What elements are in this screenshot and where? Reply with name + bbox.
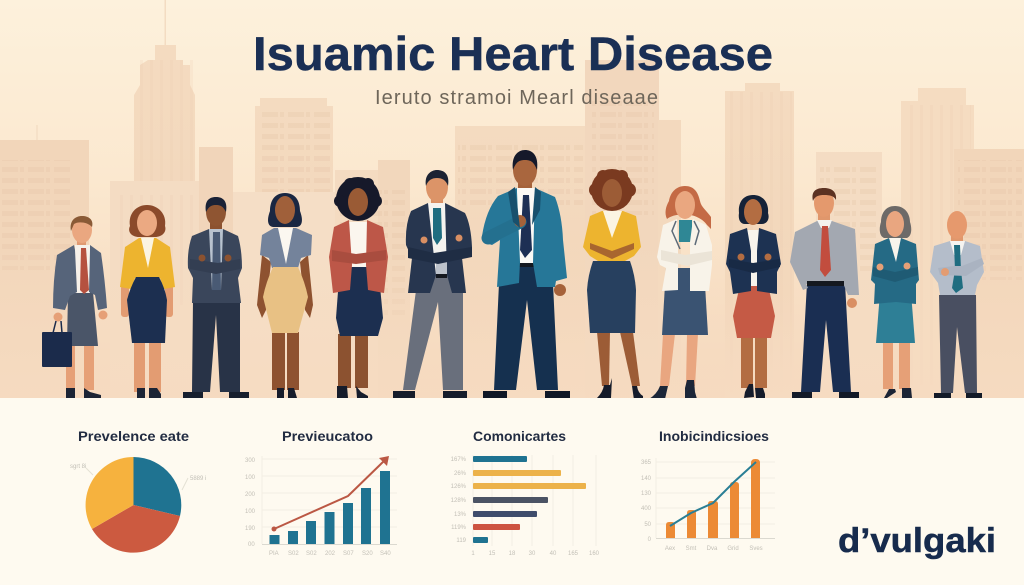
combo chart grid and labels: Dva (707, 546, 718, 552)
person 2: yellow blouse (120, 205, 175, 398)
person 12: teal blazer and skirt (871, 206, 919, 398)
bar chart heading: Previeucatoo (282, 429, 373, 444)
horizontal chart grid and labels: 167% (451, 457, 467, 463)
bar chart grid and axes: 300 (245, 458, 256, 464)
bar chart grid and axes: PIA (269, 551, 279, 557)
person 13: bald man in light grey (930, 211, 984, 399)
combo chart grid and labels: Grid (727, 546, 739, 552)
bar chart grid and axes: S07 (343, 551, 354, 557)
logo: d’vulgaki (838, 522, 996, 560)
person 11: grey shirt red tie (790, 188, 859, 398)
horizontal chart grid and labels: 126% (451, 484, 467, 490)
horizontal chart grid and labels: 13% (454, 512, 467, 518)
combo chart grid and labels (641, 458, 775, 552)
pie slices (86, 457, 181, 553)
title: Isuamic Heart Disease (253, 27, 773, 80)
person 7: teal jacket central figure (482, 150, 570, 399)
bar chart grid and axes: 00 (248, 542, 255, 548)
bars (270, 471, 390, 544)
horizontal chart grid and labels: 160 (589, 551, 600, 557)
person 10: navy blazer and red skirt (726, 195, 781, 398)
orange bars (666, 459, 760, 538)
combo chart grid and labels: 140 (641, 476, 652, 482)
pie labels (70, 464, 206, 490)
bar chart grid and axes: 100 (245, 509, 256, 515)
panel: rising bar chart (245, 429, 397, 557)
panel: pie chart (70, 429, 206, 553)
combo chart grid and labels: 365 (641, 460, 652, 466)
bar chart grid and axes: S20 (362, 551, 373, 557)
pie labels: 5889 i (190, 476, 206, 482)
horizontal chart grid and labels: 15 (489, 551, 496, 557)
bar chart grid and axes: 190 (245, 526, 256, 532)
bar chart grid and axes: S02 (306, 551, 317, 557)
horizontal chart grid and labels: 18 (509, 551, 516, 557)
trend arrow (272, 456, 389, 532)
horizontal chart grid and labels: 128% (451, 498, 467, 504)
bar chart grid and axes (245, 456, 397, 557)
person 9: doctor in white coat (649, 186, 712, 399)
horizontal chart heading: Comonicartes (473, 429, 566, 444)
person 1: grey jacket with bag (42, 216, 108, 399)
combo chart grid and labels: Sves (749, 546, 763, 552)
horizontal chart grid and labels: 30 (529, 551, 536, 557)
person 3: dark suit arms crossed (183, 197, 249, 398)
combo chart grid and labels: 400 (641, 506, 652, 512)
combo chart grid and labels: 130 (641, 491, 652, 497)
city skyline (0, 0, 1024, 400)
bar chart grid and axes: 200 (245, 492, 256, 498)
teal trend line (670, 462, 756, 526)
horizontal bars (473, 456, 586, 543)
bar chart grid and axes: 100 (245, 475, 256, 481)
horizontal chart grid and labels (451, 455, 600, 557)
pie heading: Prevelence eate (78, 429, 190, 444)
combo chart grid and labels: Smt (686, 546, 697, 552)
horizontal chart grid and labels: 119% (451, 525, 467, 531)
bar chart grid and axes: 202 (325, 551, 336, 557)
bar chart grid and axes: S40 (380, 551, 391, 557)
subtitle: Ieruto stramoi Mearl diseaae (375, 87, 658, 109)
panel: orange bars with line (641, 429, 775, 552)
horizontal chart grid and labels: 40 (550, 551, 557, 557)
bottom panel (0, 398, 1024, 585)
person 8: yellow blouse with curly hair (583, 169, 643, 400)
combo chart grid and labels: Aex (665, 546, 675, 552)
pie labels: sgrt 8i (70, 464, 86, 470)
horizontal chart grid and labels: 1 (471, 551, 475, 557)
horizontal chart grid and labels: 119 (456, 538, 467, 544)
person 6: navy jacket grey trousers (393, 170, 472, 399)
person 5: red jacket with afro (329, 177, 388, 398)
combo chart grid and labels: 0 (648, 537, 652, 543)
person 4: grey top and tan skirt (257, 193, 313, 398)
combo chart heading: Inobicindicsioes (659, 429, 769, 444)
background sky (0, 0, 1024, 400)
panel: horizontal bar chart (451, 429, 600, 557)
bar chart grid and axes: S02 (288, 551, 299, 557)
horizontal chart grid and labels: 26% (454, 471, 467, 477)
combo chart grid and labels: 50 (644, 522, 652, 528)
horizontal chart grid and labels: 165 (568, 551, 579, 557)
